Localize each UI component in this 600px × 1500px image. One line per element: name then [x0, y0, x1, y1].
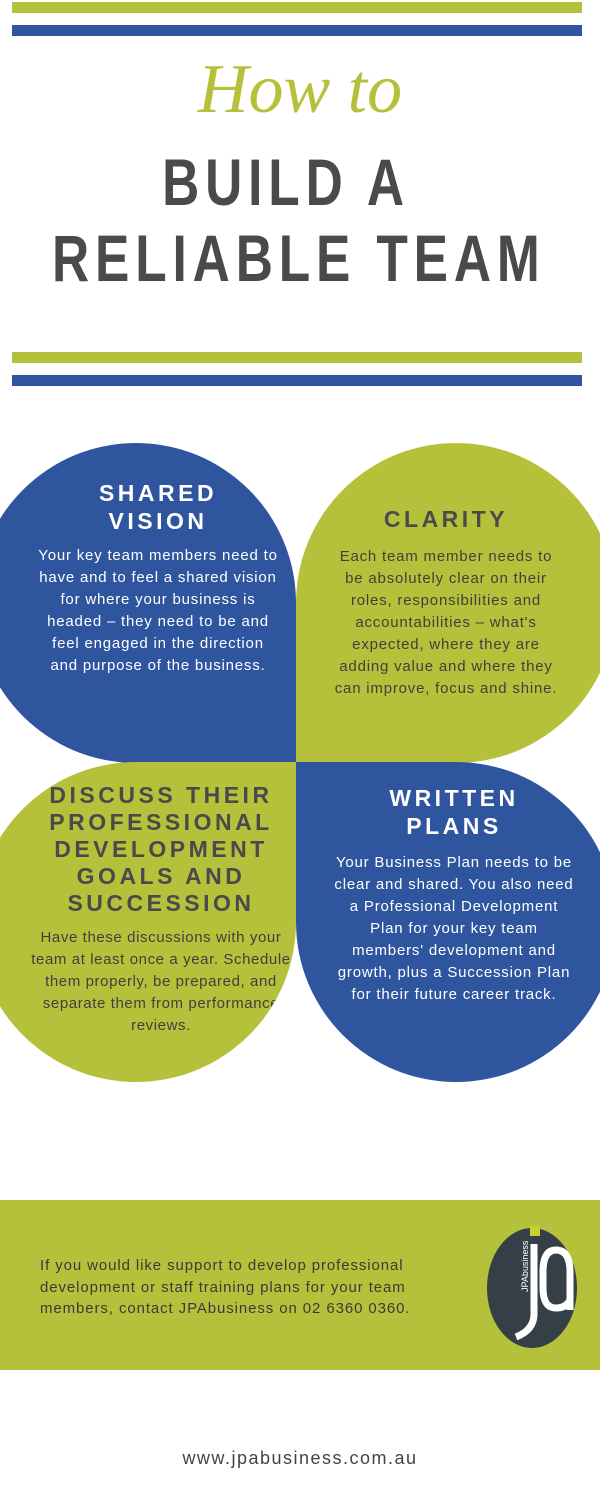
panel: written plans: [296, 762, 600, 1082]
text: Have these discussions with your team at least once a year. Schedule them properly, be prepared, and separate them from performance reviews.: [31, 929, 291, 1034]
bar blue: [12, 375, 582, 386]
panel: clarity: [296, 443, 600, 763]
top bar blue: [12, 25, 582, 36]
heading: [99, 480, 217, 534]
title main: RELIABLE TEAM: [52, 221, 546, 295]
icon: jpa logo: JPAbusiness: [520, 1240, 530, 1292]
heading: CLARITY: [384, 506, 508, 532]
text: Your Business Plan needs to be clear and shared. You also need a Professional Development Plan for your key team members' development and growth, plus a Succession Plan for their future career track.: [334, 854, 574, 1003]
heading: VISION: [109, 508, 207, 534]
icon: jpa logo: [487, 1226, 577, 1348]
heading: DISCUSS THEIR PROFESSIONAL DEVELOPMENT GOALS AND SUCCESSION: [49, 782, 273, 916]
top bar green: [12, 2, 582, 13]
heading: [389, 785, 519, 839]
contact text: If you would like support to develop professional development or staff training plans for your team members, contact JPAbusiness on 02 6360 0360.: [40, 1257, 410, 1317]
title main: BUILD A: [162, 145, 410, 219]
panel: discuss development: [0, 762, 296, 1082]
title script: How to: [198, 51, 402, 128]
text: Your key team members need to have and to feel a shared vision for where your business is headed – they need to be and feel engaged in the direction and purpose of the business.: [38, 547, 278, 674]
footer band: [0, 1200, 600, 1370]
title main: [52, 145, 546, 295]
heading: WRITTEN: [389, 785, 519, 811]
heading: SHARED: [99, 480, 217, 506]
text: Each team member needs to be absolutely clear on their roles, responsibilities and accountabilities – what's expected, where they are adding value and where they can improve, focus and shine.: [335, 548, 557, 697]
panel: shared vision: [0, 443, 296, 763]
bar green: [12, 352, 582, 363]
website url: www.jpabusiness.com.au: [182, 1448, 418, 1468]
heading: PLANS: [406, 813, 502, 839]
